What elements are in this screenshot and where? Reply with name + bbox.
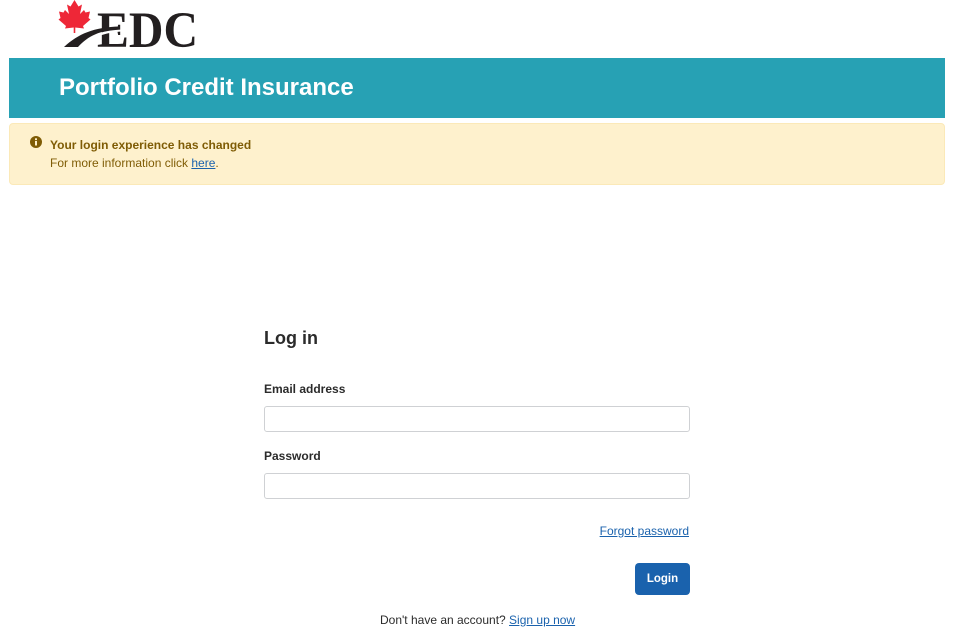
email input [264,406,690,432]
forgot password link: Forgot password [600,524,689,538]
email label: Email address [264,382,345,396]
logo: EDC [58,0,198,52]
icon: info circle [30,136,42,148]
login button: Login [647,573,678,585]
sign up text: Don't have an account? Sign up now [380,613,575,627]
login form [264,328,690,627]
alert panel [9,123,945,185]
icon: maple leaf [58,0,90,33]
password label: Password [264,449,321,463]
login button [635,563,690,595]
alert heading: Your login experience has changed [50,138,251,152]
password input [264,473,690,499]
title: Portfolio Credit Insurance [59,74,354,101]
header banner [9,58,945,118]
alert text: For more information click here. [50,156,219,170]
logo swoosh [64,26,122,47]
form heading: Log in [264,328,318,348]
